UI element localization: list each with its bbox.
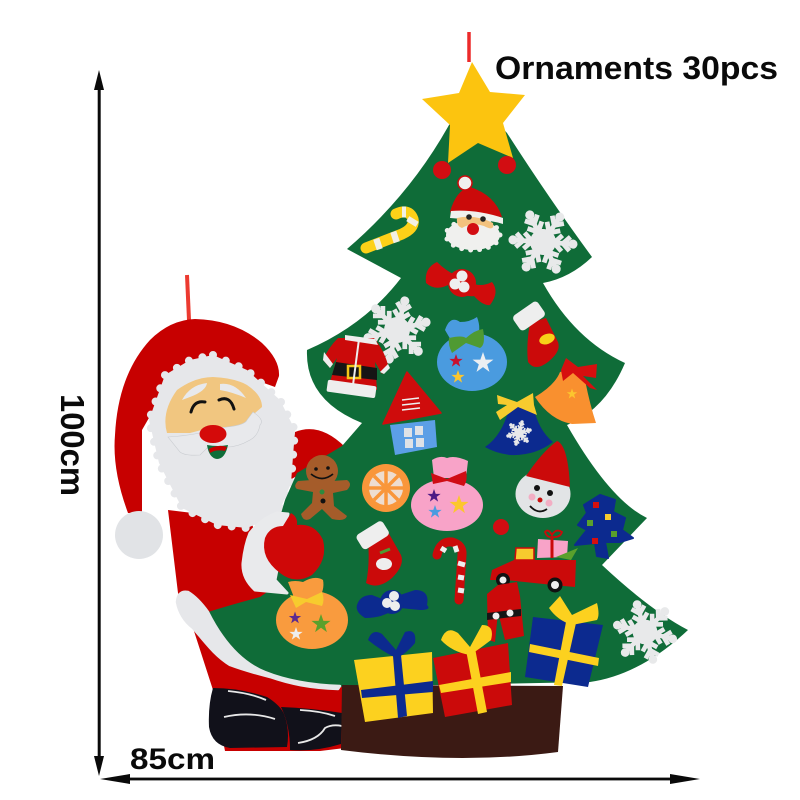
santa shoes [209, 688, 342, 750]
christmas tree [208, 95, 688, 687]
ornament: yellow candy cane [366, 212, 414, 248]
santa brows [182, 383, 246, 400]
ornament: orange gift bag [276, 578, 348, 649]
ornament: blue felt tree [575, 495, 633, 558]
label: width 85cm: 85cm [130, 743, 215, 776]
santa moustache [168, 412, 261, 455]
santa legs [168, 510, 345, 751]
hanging loop: santa [187, 275, 189, 320]
ornament: red stocking two [355, 520, 402, 586]
gift: blue box [525, 596, 603, 687]
ornament: red truck with gift [490, 531, 578, 592]
hanging loop: tree [467, 32, 471, 62]
santa hat [115, 319, 279, 513]
arrow: horizontal width dimension [100, 774, 700, 784]
arrow: vertical height dimension [94, 70, 104, 776]
snowflake: upper right [497, 196, 589, 288]
ornament: gingerbread man [295, 455, 350, 520]
snowflake: middle left [355, 288, 439, 372]
ornament: orange bell [535, 358, 597, 424]
santa face [165, 377, 262, 433]
label: height 100cm: 100cm [54, 394, 91, 496]
ornament: blue gift bag [437, 317, 507, 391]
red pompoms [433, 156, 516, 535]
santa nose [200, 425, 226, 443]
ornament: santa trousers [487, 582, 524, 642]
ornament: red striped candy cane [437, 542, 465, 600]
pot [341, 685, 563, 758]
santa eyes [191, 399, 234, 412]
ornament: red candy bow [426, 262, 496, 305]
santa beard and hair [149, 355, 295, 528]
ornament: snowman [516, 441, 570, 518]
snowflake: lower right [605, 592, 685, 672]
ornament: blue candy bow [357, 590, 428, 618]
ornament: pink gift bag [411, 457, 483, 531]
gift: red box [433, 625, 512, 717]
ornament: house [383, 372, 441, 455]
gift: yellow box [354, 631, 433, 722]
santa arm [290, 429, 345, 480]
santa mouth [207, 445, 228, 459]
ornament: blue bell [485, 393, 553, 455]
ornament: orange slice [362, 464, 410, 512]
ornament: santa head [446, 176, 503, 250]
star topper [422, 62, 525, 163]
ornament: red stocking one [512, 300, 559, 367]
santa belt trim [177, 592, 340, 689]
santa pompom [115, 511, 163, 559]
santa mitten and cuff [243, 513, 324, 593]
santa figure [115, 319, 345, 751]
ornament: santa coat [323, 335, 390, 398]
title: ornaments count: Ornaments 30pcs [495, 50, 778, 86]
